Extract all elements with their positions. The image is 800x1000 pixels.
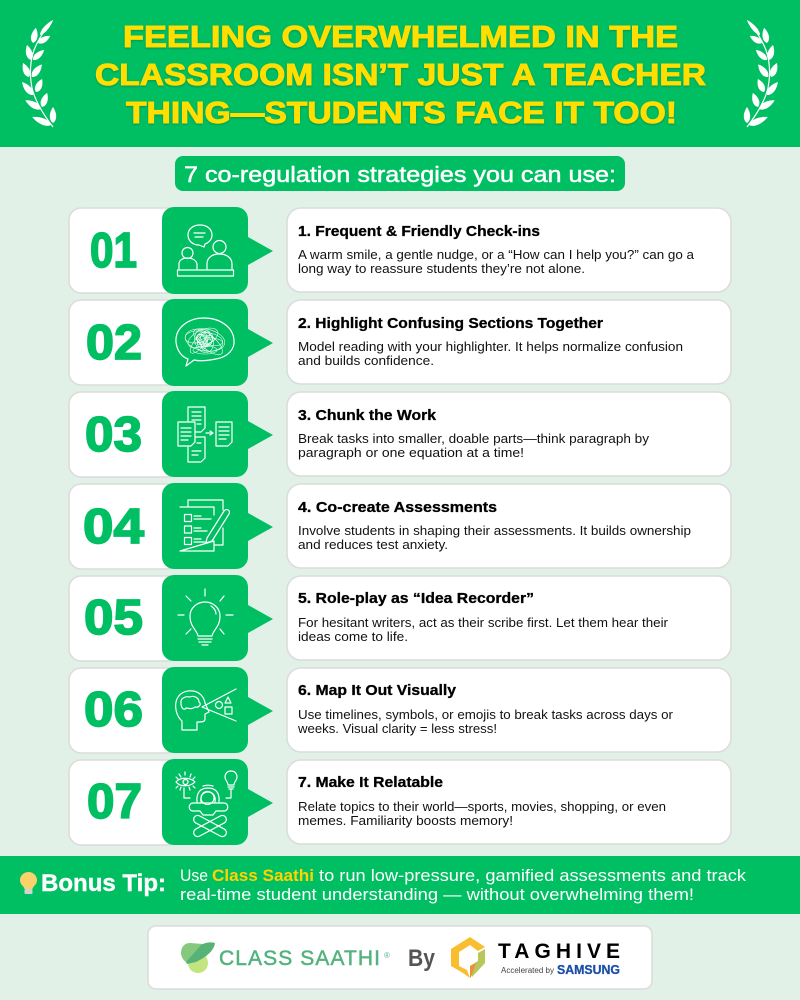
card: strategy 6 text xyxy=(287,668,731,752)
strategy 6 row xyxy=(69,667,731,753)
title xyxy=(95,19,706,130)
card: strategy 1 text xyxy=(287,208,731,292)
card: strategy 5 text: 5. Role-play as “Idea Recorder” xyxy=(298,591,534,607)
card: strategy 2 text: Model reading with your highlighter. It helps normalize confusion xyxy=(298,340,683,354)
accelerated by Samsung: SAMSUNG xyxy=(557,962,620,977)
card: strategy 6 text: weeks. Visual clarity = less stress! xyxy=(297,722,497,736)
card: strategy 3 text: 3. Chunk the Work xyxy=(298,408,437,424)
icon: meditating figure with eye and bulb xyxy=(176,771,237,838)
logo: Taghive wordmark: TAGHIVE xyxy=(498,940,620,963)
subtitle pill xyxy=(175,156,625,191)
icon: assessment checklist with pencil xyxy=(180,500,229,551)
bonus text: real-time student understanding — without overwhelming them! xyxy=(180,885,694,904)
icon: bonus light bulb xyxy=(20,872,37,894)
strategy 5 row xyxy=(69,575,731,661)
number 04: 04 xyxy=(83,500,144,554)
card: strategy 3 text: Break tasks into smaller, doable parts—think paragraph by xyxy=(298,432,650,446)
card: strategy 5 text: ideas come to life. xyxy=(298,630,408,644)
icon: head with visual map xyxy=(176,689,236,730)
icon: light bulb xyxy=(178,589,233,645)
card: strategy 1 text: long way to reassure students they’re not alone. xyxy=(298,262,585,276)
card: strategy 5 text: For hesitant writers, act as their scribe first. Let them hear their xyxy=(298,616,668,630)
card: strategy 5 text xyxy=(287,576,731,660)
card: strategy 3 text xyxy=(287,392,731,476)
logo card: ® xyxy=(384,951,390,960)
logo card xyxy=(148,926,652,989)
strategy 3 row xyxy=(69,391,731,477)
bonus text: to run low-pressure, gamified assessments and track xyxy=(319,866,747,885)
bonus text xyxy=(180,866,747,904)
accelerated by Samsung xyxy=(501,962,620,977)
card: strategy 6 text: Use timelines, symbols, or emojis to break tasks across days or xyxy=(298,708,673,722)
card: strategy 4 text: 4. Co-create Assessments xyxy=(298,500,497,516)
logo: Taghive mark xyxy=(451,937,485,978)
card: strategy 4 text xyxy=(287,484,731,568)
number 07: 07 xyxy=(87,775,142,829)
bonus text: Class Saathi xyxy=(212,866,314,885)
icon tile with pointer xyxy=(162,207,273,294)
icon tile with pointer xyxy=(162,391,273,477)
title: THING—STUDENTS FACE IT TOO! xyxy=(126,95,677,130)
bonus text: Use xyxy=(180,866,208,885)
number 02: 02 xyxy=(86,316,142,370)
number 03: 03 xyxy=(85,408,142,462)
card: strategy 4 text: Involve students in shaping their assessments. It builds ownership xyxy=(298,524,691,538)
card: strategy 7 text xyxy=(287,760,731,844)
card: strategy 7 text: Relate topics to their world—sports, movies, shopping, or even xyxy=(298,800,666,814)
card: strategy 2 text: 2. Highlight Confusing Sections Together xyxy=(298,316,603,332)
subtitle pill: 7 co-regulation strategies you can use: xyxy=(184,162,616,187)
logo: Class Saathi wordmark: CLASS SAATHI xyxy=(219,947,380,970)
card: strategy 7 text: memes. Familiarity boosts memory! xyxy=(298,814,513,828)
icon: left laurel xyxy=(20,18,56,128)
header banner xyxy=(0,0,800,147)
icon tile with pointer xyxy=(162,483,273,569)
card: strategy 2 text xyxy=(287,300,731,384)
icon tile with pointer xyxy=(162,575,273,661)
strategy 7 row xyxy=(69,759,731,845)
by label: By xyxy=(408,945,436,972)
strategy 1 row xyxy=(69,207,731,294)
number 01: 01 xyxy=(90,224,137,278)
card: strategy 4 text: and reduces test anxiety. xyxy=(298,538,448,552)
card: strategy 7 text: 7. Make It Relatable xyxy=(298,775,443,791)
accelerated by Samsung: Accelerated by xyxy=(501,966,554,975)
strategy 2 row xyxy=(69,299,731,386)
card: strategy 6 text: 6. Map It Out Visually xyxy=(298,683,456,699)
icon: right laurel xyxy=(744,18,780,128)
icon tile with pointer xyxy=(162,759,273,845)
card: strategy 2 text: and builds confidence. xyxy=(298,354,434,368)
icon: teacher and student talking xyxy=(178,225,234,276)
bonus tip band xyxy=(0,856,800,914)
icon: documents chunked xyxy=(178,407,232,462)
card: strategy 1 text: 1. Frequent & Friendly Check-ins xyxy=(298,224,540,240)
bonus heading: Bonus Tip: xyxy=(41,870,166,897)
number 06: 06 xyxy=(84,683,143,737)
card: strategy 3 text: paragraph or one equation at a time! xyxy=(298,446,524,460)
logo: Class Saathi mark xyxy=(181,942,215,973)
title: CLASSROOM ISN’T JUST A TEACHER xyxy=(95,57,706,92)
number 05: 05 xyxy=(84,591,143,645)
card: strategy 1 text: A warm smile, a gentle nudge, or a “How can I help you?” can go a xyxy=(298,248,694,262)
icon: tangled thoughts brain xyxy=(176,318,234,366)
strategy 4 row xyxy=(69,483,731,569)
icon tile with pointer xyxy=(162,667,273,753)
icon tile with pointer xyxy=(162,299,273,386)
title: FEELING OVERWHELMED IN THE xyxy=(123,19,678,54)
